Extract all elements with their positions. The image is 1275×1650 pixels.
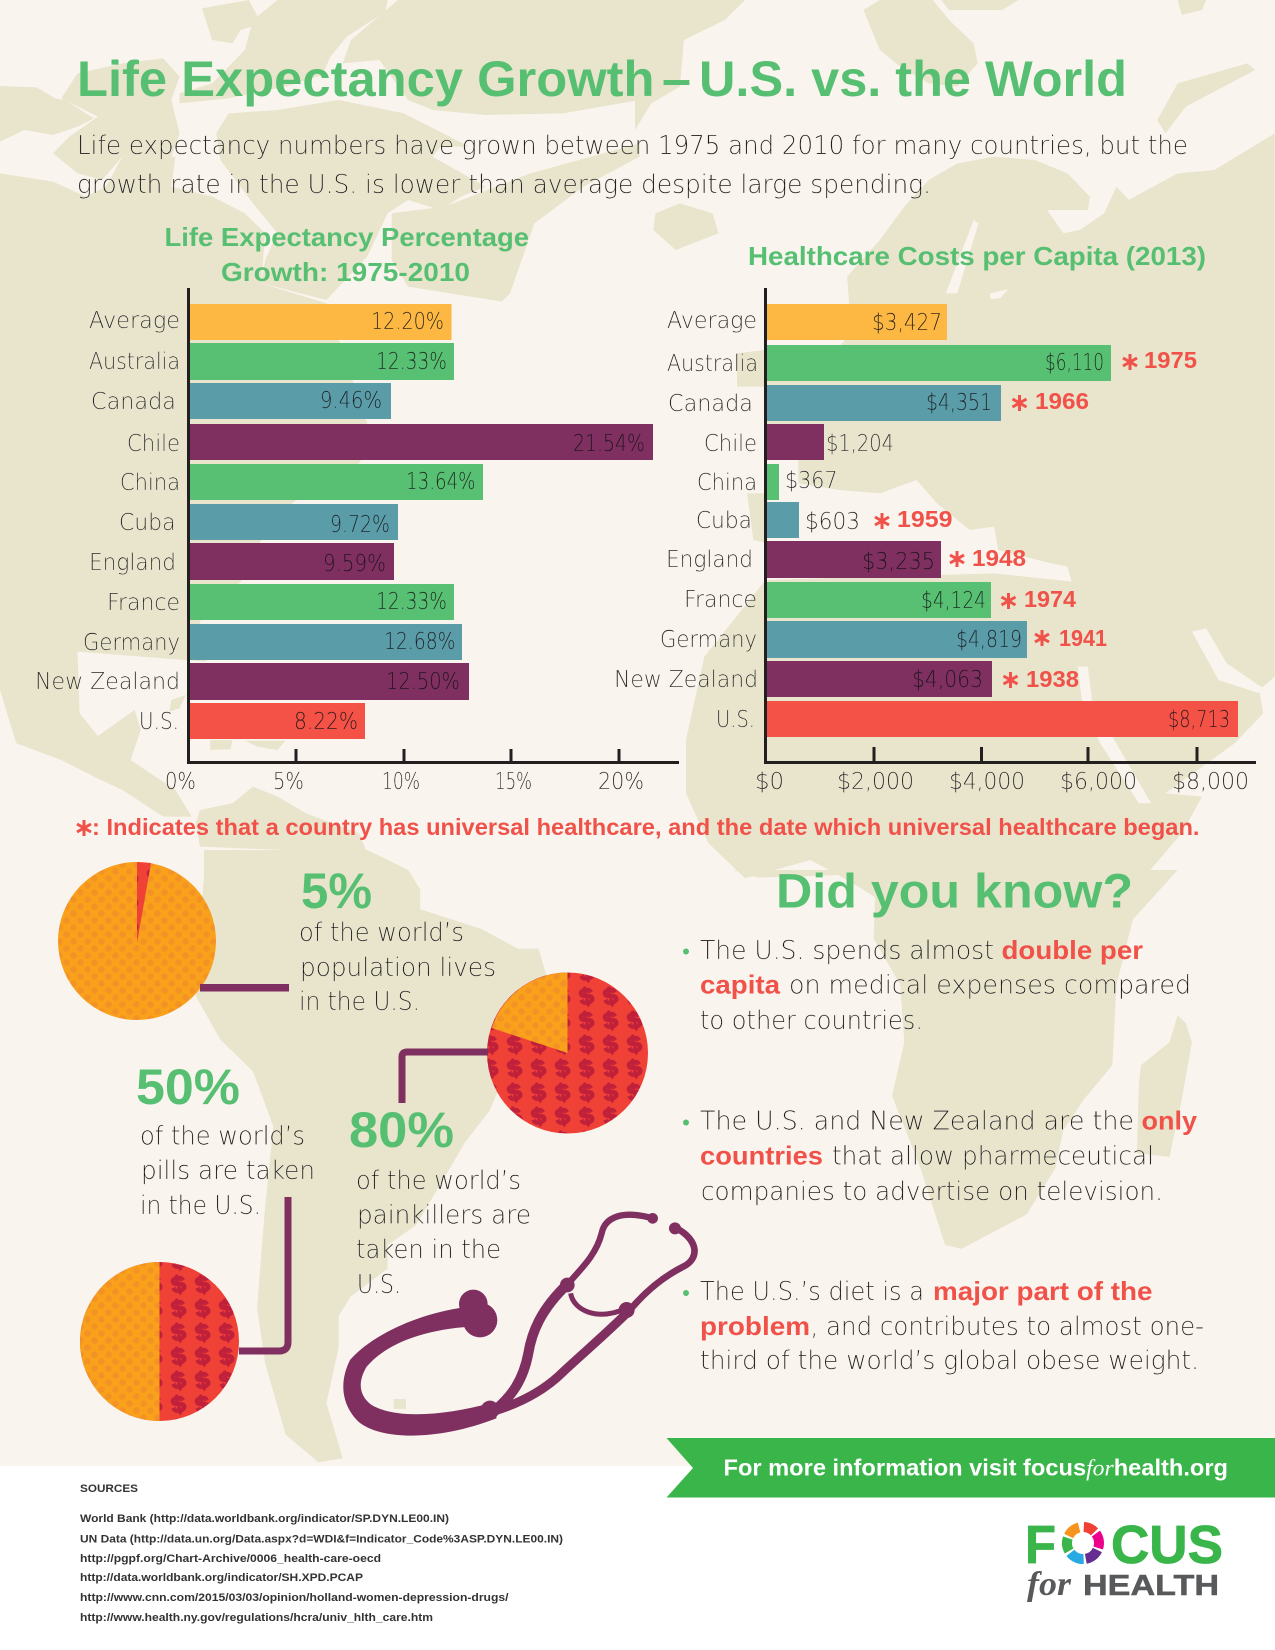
- axis: [165, 288, 679, 795]
- bar: New Zealand: New Zealand: [614, 667, 758, 693]
- title: –: [662, 51, 691, 107]
- fact 3: The U.S.’s diet is a: [700, 1277, 924, 1307]
- bar: Canada: Canada: [668, 391, 753, 417]
- bar: China: $367: [785, 468, 838, 494]
- fact 3: [683, 1276, 1204, 1376]
- axis: 15%: [495, 769, 532, 795]
- sources: http://www.health.ny.gov/regulations/hcra/univ_hlth_care.htm: [80, 1612, 433, 1624]
- bar: Germany: [83, 624, 462, 660]
- bar: Chile: [704, 424, 894, 460]
- chart heading: Life Expectancy Percentage: [164, 222, 529, 252]
- bar: Cuba: $603: [805, 509, 860, 535]
- bar: Average: [89, 304, 452, 340]
- logo: focus for health: HEALTH: [1083, 1570, 1219, 1602]
- stat: 50 percent: in the U.S.: [140, 1191, 261, 1221]
- bar: Average: [667, 304, 947, 340]
- bar: England: [89, 543, 394, 580]
- axis: $6,000: [1060, 769, 1137, 795]
- stat: 50 percent: [136, 1059, 315, 1221]
- white footer background: [0, 1466, 1275, 1650]
- bar: New Zealand: $4,063: [912, 667, 983, 693]
- fact 3: problem: [700, 1311, 810, 1341]
- bar: New Zealand: 12.50%: [386, 669, 460, 695]
- bar: China: [697, 464, 838, 500]
- logo: focus for health: for: [1027, 1566, 1072, 1603]
- bar: Chile: $1,204: [826, 431, 894, 457]
- panel: healthcare cost chart: [614, 241, 1256, 795]
- bar: U.S.: U.S.: [716, 707, 755, 733]
- fact 2: only: [1142, 1106, 1198, 1136]
- bar: U.S.: [716, 701, 1238, 737]
- fact 3: , and contributes to almost one-: [810, 1312, 1204, 1342]
- bar: Australia: [667, 345, 1197, 381]
- bar: Germany: Germany: [83, 630, 180, 656]
- bar: England: England: [89, 550, 176, 576]
- axis: 5%: [273, 769, 304, 795]
- heading: did you know: Did you know?: [776, 866, 1133, 918]
- bar: England: $3,235: [862, 549, 935, 575]
- bar: China: [120, 464, 483, 500]
- bar: Canada: $4,351: [926, 390, 992, 416]
- bar: Australia: Australia: [89, 349, 180, 375]
- bar: Australia: 1975: [1144, 347, 1197, 373]
- intro text: growth rate in the U.S. is lower than average despite large spending.: [77, 170, 931, 200]
- bar: England: 1948: [972, 545, 1026, 571]
- bar: France: [684, 582, 1076, 618]
- pie: 80 percent: [487, 972, 648, 1134]
- bar: France: 12.33%: [376, 589, 447, 615]
- stat: 5 percent: population lives: [300, 953, 496, 983]
- bar: England: [666, 541, 1026, 578]
- sources: UN Data (http://data.un.org/Data.aspx?d=WDI&f=Indicator_Code%3ASP.DYN.LE00.IN): [80, 1534, 563, 1546]
- bar: France: France: [107, 590, 180, 616]
- bar: New Zealand: [35, 663, 469, 700]
- bar: France: 1974: [1024, 586, 1076, 612]
- bar: Australia: [89, 343, 454, 380]
- chart heading: Healthcare Costs per Capita (2013): [748, 241, 1206, 271]
- sources: http://pgpf.org/Chart-Archive/0006_health-care-oecd: [80, 1553, 381, 1565]
- title: U.S. vs. the World: [699, 51, 1127, 107]
- bar: Cuba: [696, 502, 952, 538]
- fact 2: The U.S. and New Zealand are the: [700, 1106, 1134, 1136]
- stat: 80 percent: U.S.: [357, 1270, 401, 1300]
- bar: Average: Average: [667, 308, 757, 334]
- logo: focus for health: F: [1025, 1515, 1056, 1575]
- axis: 10%: [382, 769, 420, 795]
- fact 3: major part of the: [933, 1276, 1152, 1306]
- intro text: [77, 131, 1188, 200]
- axis: 20%: [598, 769, 644, 795]
- bar: Chile: 21.54%: [573, 431, 645, 457]
- connector: 5 percent: [200, 984, 289, 992]
- bar: Canada: Canada: [91, 389, 176, 415]
- bar: Chile: Chile: [127, 431, 180, 457]
- stat: 5 percent: of the world’s: [299, 918, 464, 948]
- logo: focus for health: [1025, 1515, 1223, 1603]
- bar: Chile: Chile: [704, 431, 757, 457]
- stat: 80 percent: 80%: [349, 1102, 454, 1158]
- bar: Cuba: 1959: [897, 506, 952, 532]
- icon: aperture: [1067, 1527, 1099, 1559]
- bar: Cuba: [119, 504, 398, 540]
- axis: [755, 288, 1256, 795]
- sources: World Bank (http://data.worldbank.org/indicator/SP.DYN.LE00.IN): [80, 1513, 449, 1525]
- bar: U.S.: [139, 703, 365, 739]
- axis: $8,000: [1172, 769, 1249, 795]
- bar: Canada: 9.46%: [320, 388, 382, 414]
- bar: England: England: [666, 547, 753, 573]
- bar: Germany: [660, 621, 1107, 658]
- bar: Germany: 12.68%: [384, 629, 456, 655]
- axis: 0%: [165, 769, 196, 795]
- fact 2: [683, 1106, 1198, 1207]
- fact 1: to other countries.: [700, 1006, 923, 1036]
- bar: New Zealand: 1938: [1026, 666, 1079, 692]
- connector: 50 percent: [239, 1197, 288, 1351]
- sources: http://data.worldbank.org/indicator/SH.XPD.PCAP: [80, 1572, 363, 1584]
- stat: 80 percent: [349, 1102, 531, 1300]
- sources: http://www.cnn.com/2015/03/03/opinion/holland-women-depression-drugs/: [80, 1592, 508, 1604]
- stat: 5 percent: in the U.S.: [299, 987, 420, 1017]
- bar: Cuba: 9.72%: [330, 512, 390, 538]
- fact 1: on medical expenses compared: [789, 970, 1191, 1000]
- title: Life Expectancy Growth: [77, 51, 654, 107]
- stat: 80 percent: painkillers are: [357, 1200, 531, 1230]
- fact 1: double per: [1002, 935, 1143, 965]
- stat: 5 percent: [299, 863, 496, 1017]
- bar: Canada: [91, 383, 391, 419]
- panel: life expectancy chart: [35, 222, 679, 795]
- bar: France: [107, 584, 454, 620]
- bar: U.S.: 8.22%: [294, 709, 358, 735]
- sources: SOURCES: [80, 1483, 138, 1495]
- bar: Australia: Australia: [667, 351, 758, 377]
- connector: 80 percent: [402, 1052, 488, 1103]
- bar: Germany: 1941: [1059, 625, 1107, 651]
- stat: 50 percent: pills are taken: [141, 1156, 315, 1186]
- stat: 80 percent: taken in the: [356, 1235, 501, 1265]
- bar: Australia: $6,110: [1045, 350, 1104, 376]
- fact 2: that allow pharmeceutical: [832, 1142, 1154, 1172]
- bar: Average: $3,427: [872, 310, 942, 336]
- bar: Average: 12.20%: [371, 309, 444, 335]
- bar: China: 13.64%: [406, 469, 476, 495]
- stat: 80 percent: of the world’s: [356, 1166, 521, 1196]
- bar: New Zealand: [614, 661, 1079, 697]
- logo: focus for health: CUS: [1111, 1515, 1223, 1575]
- bar: Germany: $4,819: [956, 627, 1022, 653]
- pie: 5 percent: [58, 862, 216, 1020]
- bar: France: France: [684, 587, 757, 613]
- axis: $2,000: [837, 769, 914, 795]
- chart heading: Growth: 1975-2010: [221, 257, 470, 287]
- bar: Average: Average: [89, 308, 180, 334]
- chart heading: [164, 222, 529, 287]
- bar: France: $4,124: [921, 588, 986, 614]
- bar: Cuba: Cuba: [696, 508, 752, 534]
- bar: Canada: 1966: [1035, 388, 1089, 414]
- bar: Cuba: Cuba: [119, 510, 176, 536]
- bar: Germany: Germany: [660, 627, 757, 653]
- fact 1: capita: [700, 970, 781, 1000]
- axis: $0: [755, 769, 784, 795]
- stat: 50 percent: of the world’s: [140, 1122, 305, 1152]
- sources: [80, 1483, 563, 1624]
- fact 1: [683, 935, 1191, 1036]
- fact 2: companies to advertise on television.: [701, 1177, 1163, 1207]
- bar: Canada: [668, 385, 1089, 421]
- bar: England: 9.59%: [323, 551, 386, 577]
- fact 1: The U.S. spends almost: [700, 936, 994, 966]
- axis: $4,000: [949, 769, 1025, 795]
- banner: more information: For more information visit focus forhealth.org: [724, 1454, 1228, 1480]
- fact 2: countries: [700, 1140, 823, 1170]
- bar: Australia: 12.33%: [376, 349, 447, 375]
- stat: 5 percent: 5%: [301, 863, 372, 919]
- bar: U.S.: $8,713: [1168, 707, 1230, 733]
- bar: China: China: [697, 470, 757, 496]
- bar: New Zealand: New Zealand: [35, 669, 180, 695]
- icon: stethoscope: [343, 1213, 695, 1436]
- bar: Chile: [127, 424, 653, 460]
- fact 3: third of the world’s global obese weight.: [700, 1346, 1199, 1376]
- stat: 50 percent: 50%: [136, 1059, 240, 1115]
- pie: 50 percent: [80, 1262, 239, 1421]
- intro text: Life expectancy numbers have grown between 1975 and 2010 for many countries, but the: [77, 131, 1188, 161]
- title: [77, 51, 1127, 107]
- bar: China: China: [120, 470, 180, 496]
- banner: more information: [666, 1438, 1275, 1498]
- legend note: : Indicates that a country has universal healthcare, and the date which universal healthcare began.: [92, 814, 1200, 840]
- bar: U.S.: U.S.: [139, 709, 179, 735]
